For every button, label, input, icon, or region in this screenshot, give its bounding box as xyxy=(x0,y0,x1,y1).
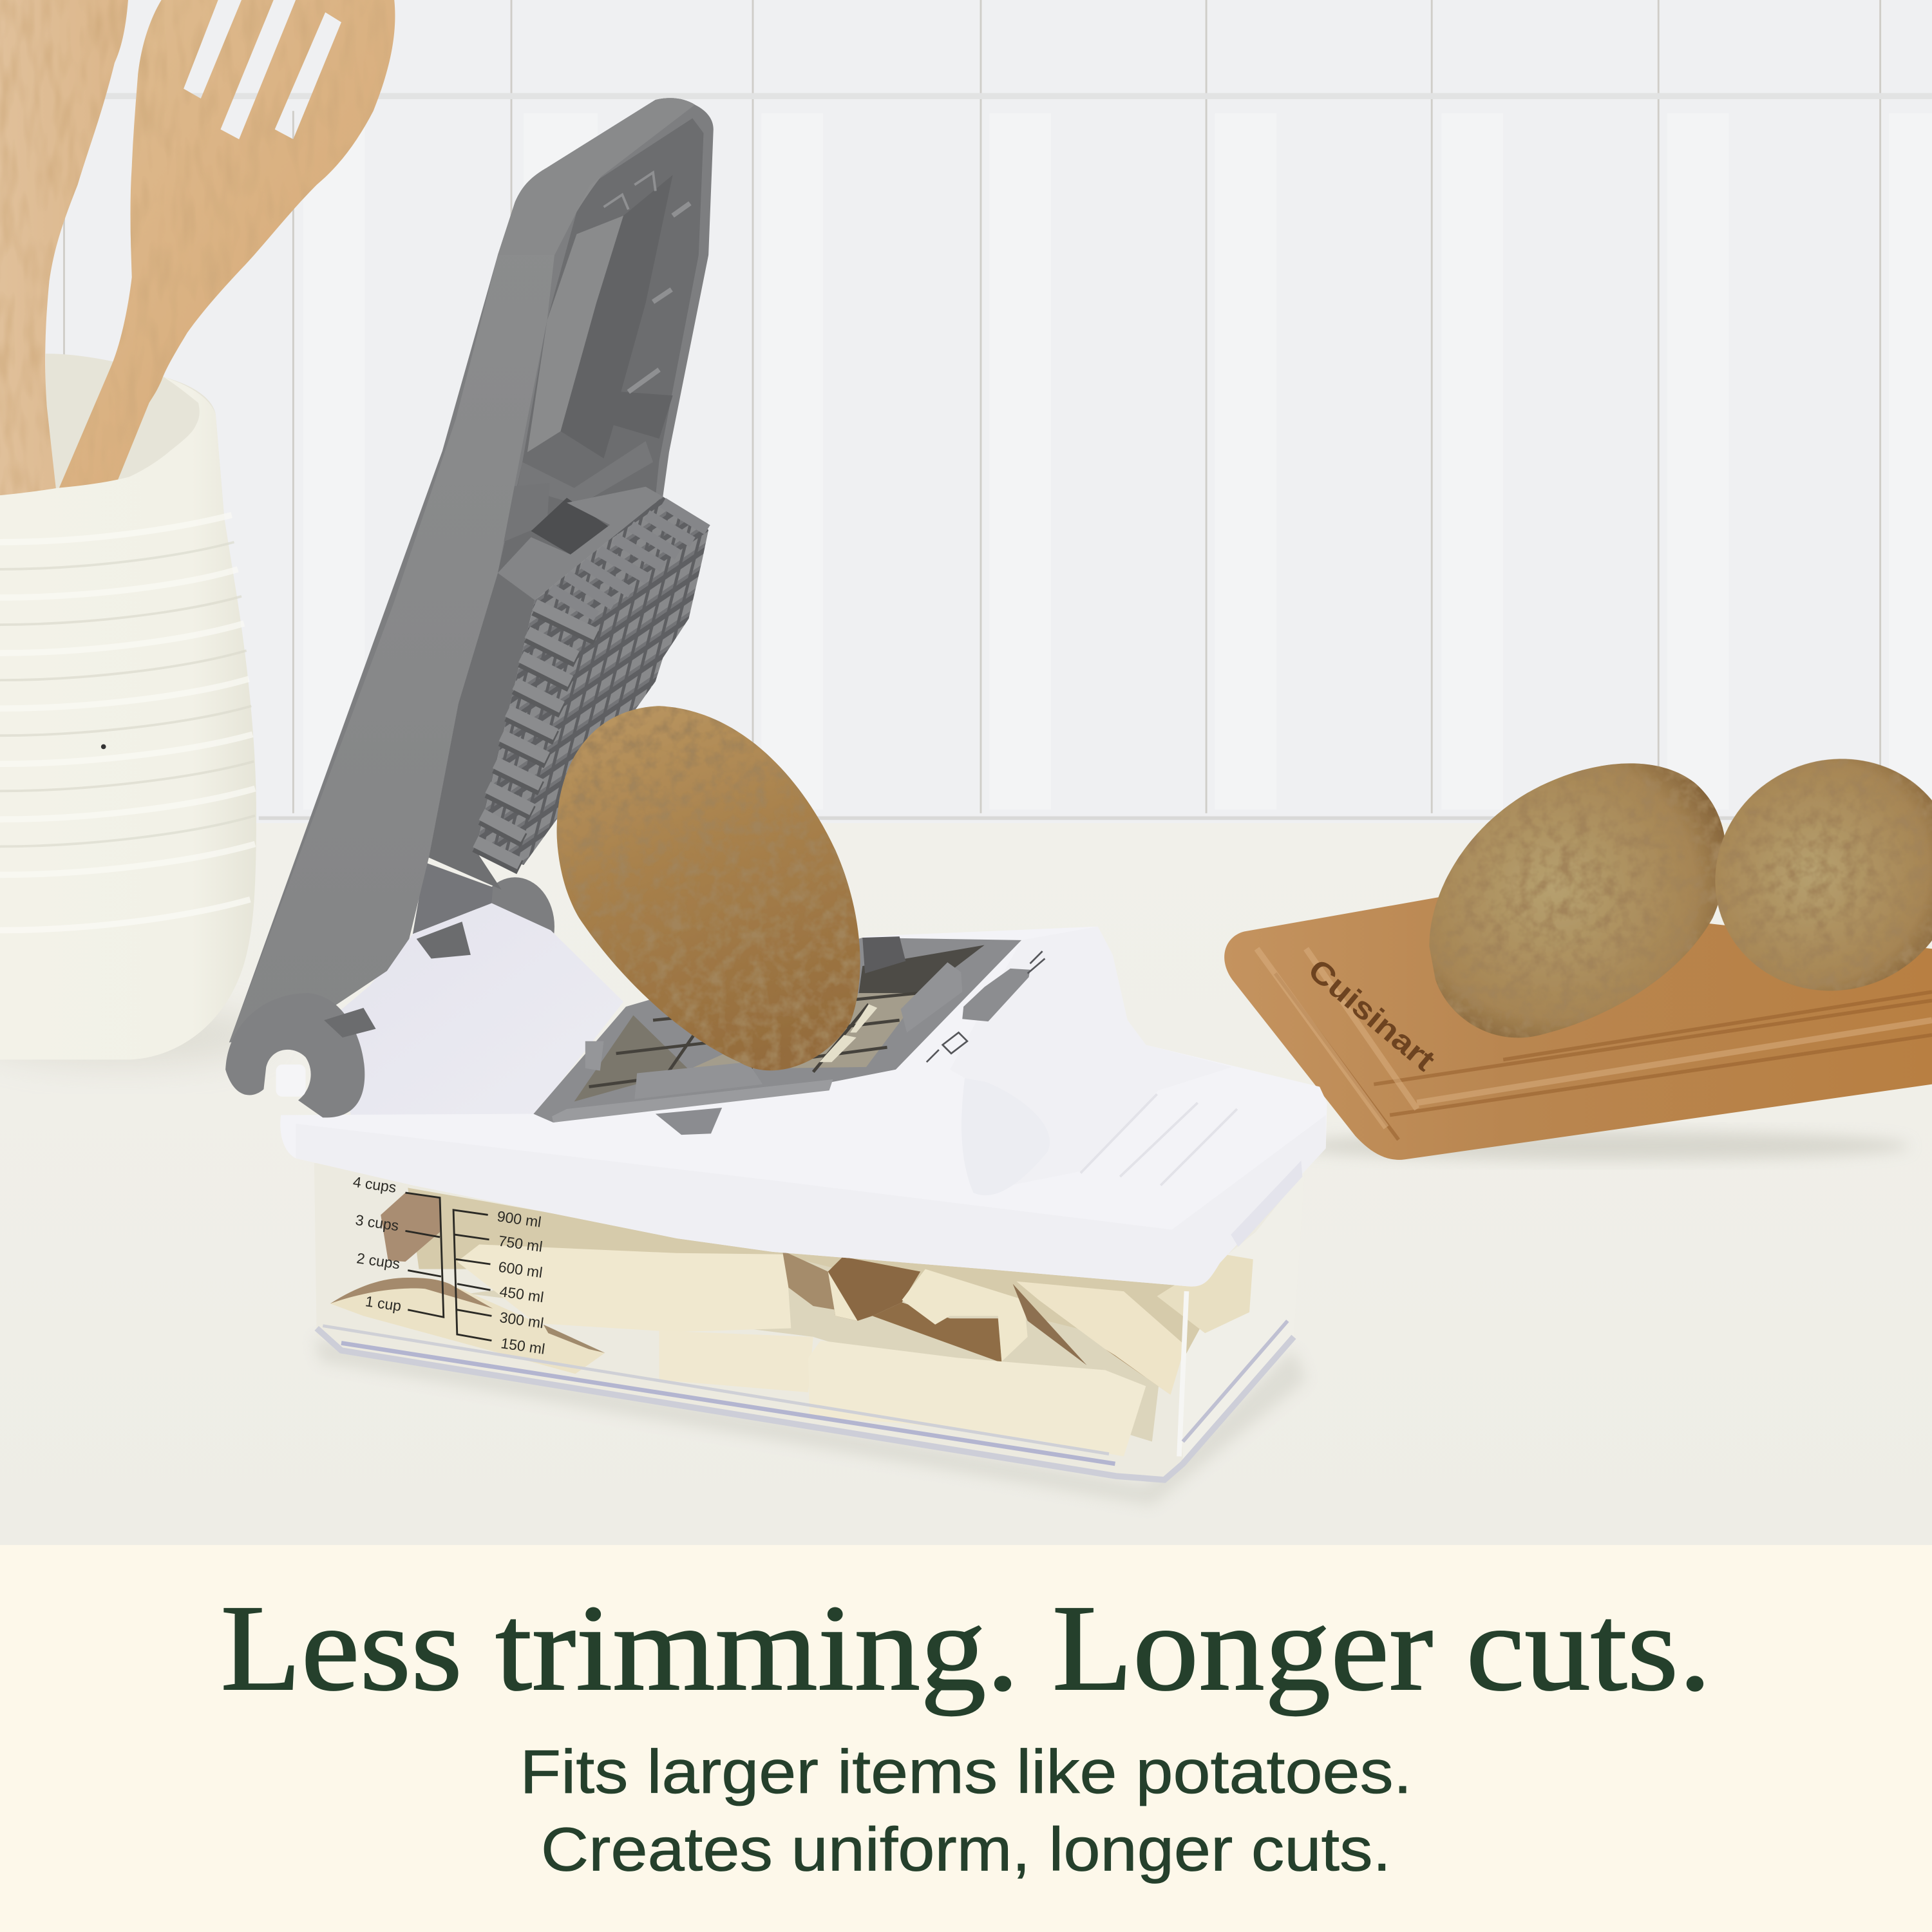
grey hinged lid xyxy=(225,98,714,1117)
background: tiled wall xyxy=(0,0,1932,850)
millilitre scale xyxy=(453,1208,546,1358)
pusher comb grid xyxy=(429,497,708,889)
upper comb teeth xyxy=(551,503,707,616)
hinge arm xyxy=(225,993,365,1117)
pivot disc behind housing xyxy=(476,877,554,976)
millilitre scale: 450 ml xyxy=(498,1283,545,1305)
clear container with potato fries xyxy=(314,1163,1305,1480)
comb body xyxy=(429,573,535,889)
lid inner ribs xyxy=(498,118,703,600)
millilitre scale: 300 ml xyxy=(498,1309,545,1331)
millilitre scale: 150 ml xyxy=(500,1334,546,1358)
white base housing xyxy=(280,862,1327,1287)
millilitre scale: 750 ml xyxy=(497,1233,544,1255)
cups scale: 1 cup xyxy=(365,1293,402,1314)
wooden utensils xyxy=(0,0,395,495)
blade grid frame xyxy=(533,936,1045,1135)
pusher mount plate xyxy=(531,498,610,554)
fries xyxy=(330,1188,1253,1456)
subheading xyxy=(520,1738,1412,1884)
measuring scale xyxy=(352,1173,546,1358)
ceramic utensil crock xyxy=(0,377,271,1065)
board logo text: Cuisinart xyxy=(1302,952,1441,1078)
heading: Less trimming. Longer cuts. xyxy=(220,1580,1712,1716)
subheading: Fits larger items like potatoes. xyxy=(520,1738,1412,1806)
ceramic crock interior xyxy=(0,354,224,518)
cups scale: 3 cups xyxy=(354,1211,400,1234)
millilitre scale: 900 ml xyxy=(496,1208,542,1231)
caption panel xyxy=(0,1545,1932,1932)
large potato on blades xyxy=(557,706,860,1070)
cups scale: 4 cups xyxy=(352,1173,397,1196)
millilitre scale: 600 ml xyxy=(497,1258,544,1281)
blade frame front rail xyxy=(552,1079,833,1122)
lid side face xyxy=(229,98,695,1043)
cups scale xyxy=(352,1173,444,1317)
shadow under container xyxy=(314,1337,1306,1506)
subheading: Creates uniform, longer cuts. xyxy=(541,1815,1391,1884)
glass base edge xyxy=(317,1291,1294,1480)
countertop xyxy=(0,823,1932,1545)
front comb teeth xyxy=(476,609,596,867)
french fry cutter xyxy=(225,98,1327,1506)
cutting board xyxy=(1224,895,1932,1160)
sliding switch xyxy=(962,969,1030,1021)
potatoes on board xyxy=(1429,719,1932,1037)
lid outer shell xyxy=(229,98,714,1043)
cups scale: 2 cups xyxy=(355,1249,401,1272)
